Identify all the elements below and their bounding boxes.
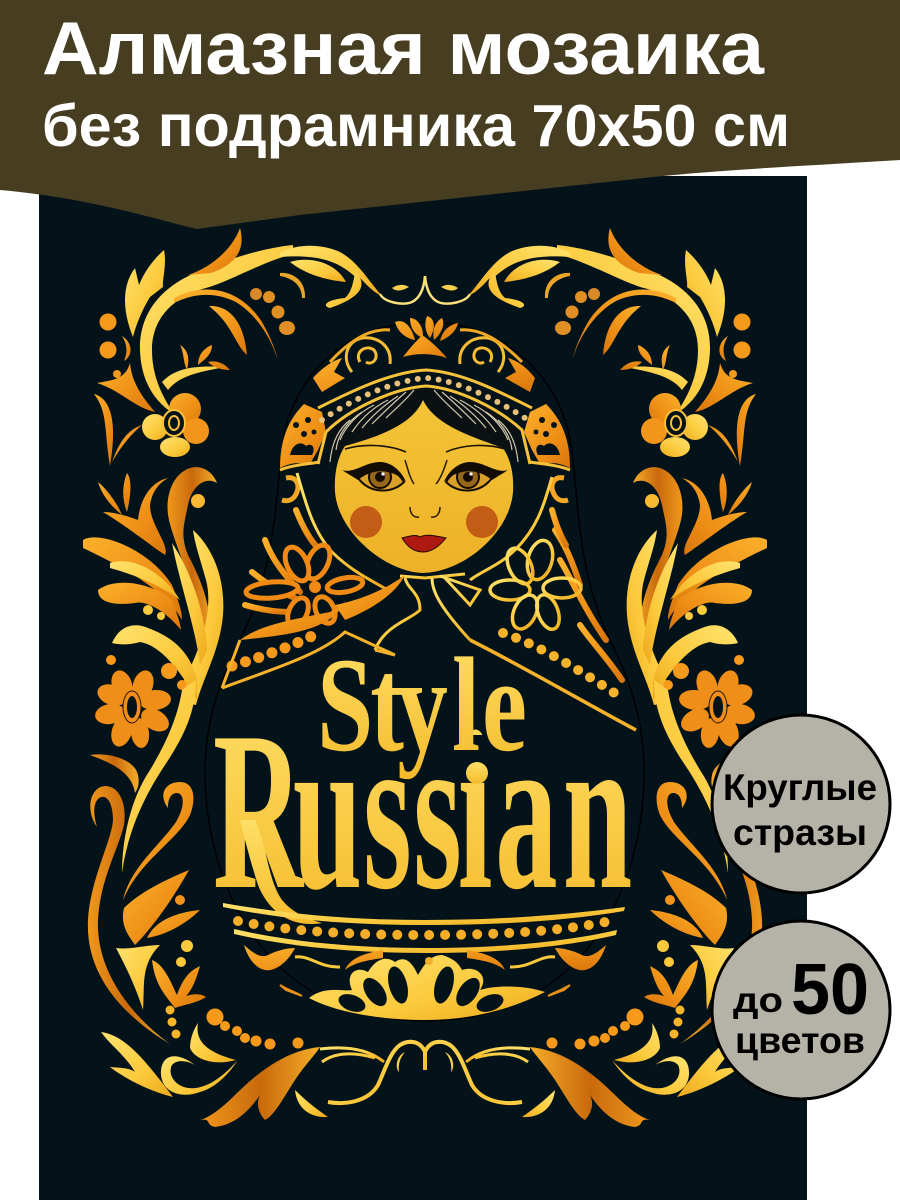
- poster background: [39, 176, 807, 1200]
- doll silhouette: [205, 322, 644, 1021]
- lower bands and beads: [223, 903, 625, 953]
- badge: up to 50 colours: до: [733, 981, 783, 1020]
- headband with beads: [318, 370, 532, 464]
- lips: [402, 535, 446, 552]
- upper left scroll: [94, 228, 295, 466]
- title Style Russian: Style: [317, 630, 527, 779]
- heading line 1: Алмазная мозаика: [42, 6, 765, 90]
- badge: up to 50 colours: [712, 921, 890, 1099]
- bottom flower ornament: [244, 945, 606, 1020]
- hair: [328, 385, 520, 462]
- heading line 2: без подрамника 70х50 см: [42, 93, 790, 159]
- left scarf flower: [240, 541, 405, 640]
- scarf bead rows: [222, 632, 636, 730]
- matryoshka doll: [205, 316, 644, 1021]
- nose lines: [405, 460, 447, 517]
- face: [335, 400, 513, 573]
- left eye: [342, 462, 406, 491]
- left half of gold floral frame: [83, 228, 425, 1127]
- right half of gold floral frame (mirror): [425, 228, 767, 1127]
- header banner: [0, 0, 900, 229]
- badge: round rhinestones: Круглые: [723, 767, 877, 808]
- middle left foliage: [83, 467, 223, 705]
- headscarf crown ornaments: [313, 316, 535, 392]
- right scarf flower: [490, 538, 581, 633]
- headscarf side panels: [280, 404, 570, 501]
- right eye: [444, 462, 508, 491]
- cheeks: [350, 506, 382, 538]
- scarf lines around face: [297, 473, 552, 650]
- top stem to centre ornament: [280, 246, 425, 308]
- bottom left flourish: [101, 1008, 425, 1127]
- middle flower: [93, 668, 173, 749]
- scarf outer fill feathers: [245, 510, 622, 680]
- bottom laurel sprig: [116, 870, 206, 1038]
- badge: up to 50 colours: цветов: [735, 1020, 865, 1061]
- title Style Russian: Russian: [213, 685, 632, 937]
- badge: round rhinestones: стразы: [733, 812, 867, 853]
- eyebrows: [345, 445, 505, 452]
- upper flower: [142, 393, 209, 457]
- badge: round rhinestones: [712, 715, 890, 893]
- lower left curves: [88, 680, 196, 1044]
- badge: up to 50 colours: 50: [791, 950, 869, 1030]
